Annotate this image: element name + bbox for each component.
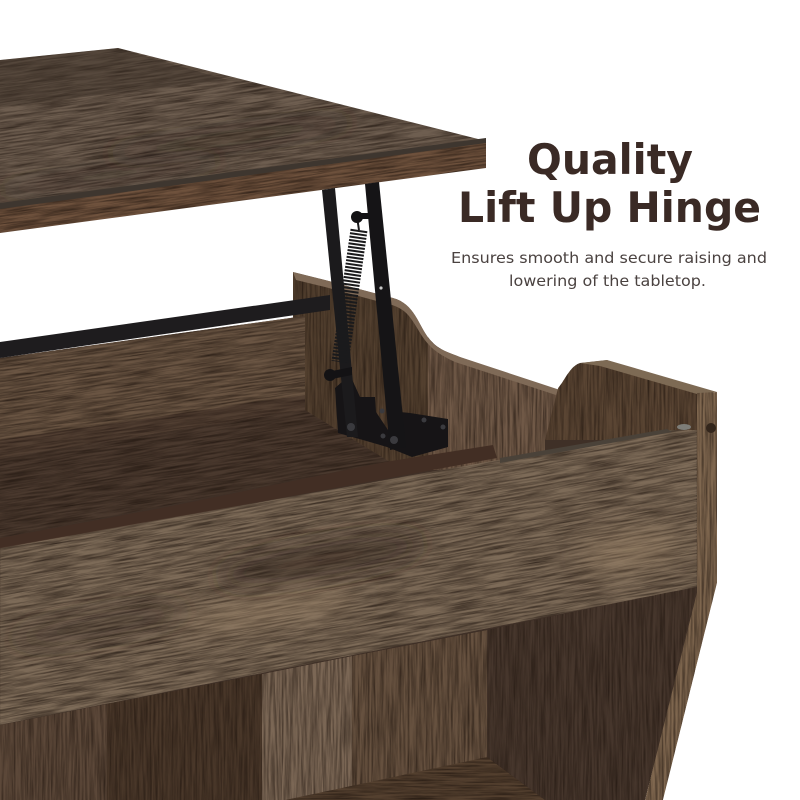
top pivot pin <box>351 211 370 223</box>
lower right dark cavity <box>487 586 697 800</box>
rear side panel with notch <box>545 360 697 440</box>
mounting plate <box>335 375 448 457</box>
tabletop surface <box>0 48 478 203</box>
inner lip strip <box>0 445 497 550</box>
dark blotch, left <box>18 600 182 650</box>
bottom pivot pin <box>324 367 352 381</box>
compartment floor <box>0 410 388 536</box>
black support bar <box>0 295 330 358</box>
tabletop front edge <box>0 143 486 233</box>
rear side panel top edge <box>580 360 717 394</box>
dark blotch, centre <box>214 526 426 594</box>
metal bracket tip <box>677 424 691 430</box>
back wall of storage compartment <box>0 316 305 457</box>
rear arm <box>322 188 358 437</box>
lower wall, light plank <box>262 656 352 800</box>
lower wall, right plank <box>352 630 487 800</box>
description text: lowering of the tabletop. <box>509 273 706 290</box>
dark streak, upper <box>118 114 342 162</box>
description text <box>451 250 767 290</box>
lower wall, middle plank <box>107 674 262 800</box>
bottom shelf <box>285 757 545 800</box>
description text: Ensures smooth and secure raising and <box>451 250 767 267</box>
right side leg <box>645 392 717 800</box>
dark streak, lower <box>14 156 206 195</box>
heading: Quality Lift Up Hinge: Quality <box>527 135 693 184</box>
side panel with curved profile, darker part <box>293 272 430 470</box>
spring <box>340 217 359 362</box>
bolts <box>347 286 446 444</box>
cabinet body <box>0 252 726 800</box>
lower wall, left plank <box>0 704 107 800</box>
side panel top edge <box>293 272 560 395</box>
light blotch, centre <box>179 581 361 639</box>
front panel <box>0 425 726 725</box>
heading: Quality Lift Up Hinge: Lift Up Hinge <box>458 183 761 232</box>
front arm <box>365 182 406 450</box>
darker rear plank <box>0 48 227 107</box>
heading: Quality Lift Up Hinge <box>458 135 761 232</box>
lift hinge mechanism <box>322 182 448 457</box>
side panel, lighter right part <box>428 337 560 470</box>
shadow at base of back wall <box>0 395 305 458</box>
light blotch, right <box>577 522 683 578</box>
lift-up tabletop <box>0 48 486 233</box>
dark base behind cabinet <box>0 316 697 800</box>
